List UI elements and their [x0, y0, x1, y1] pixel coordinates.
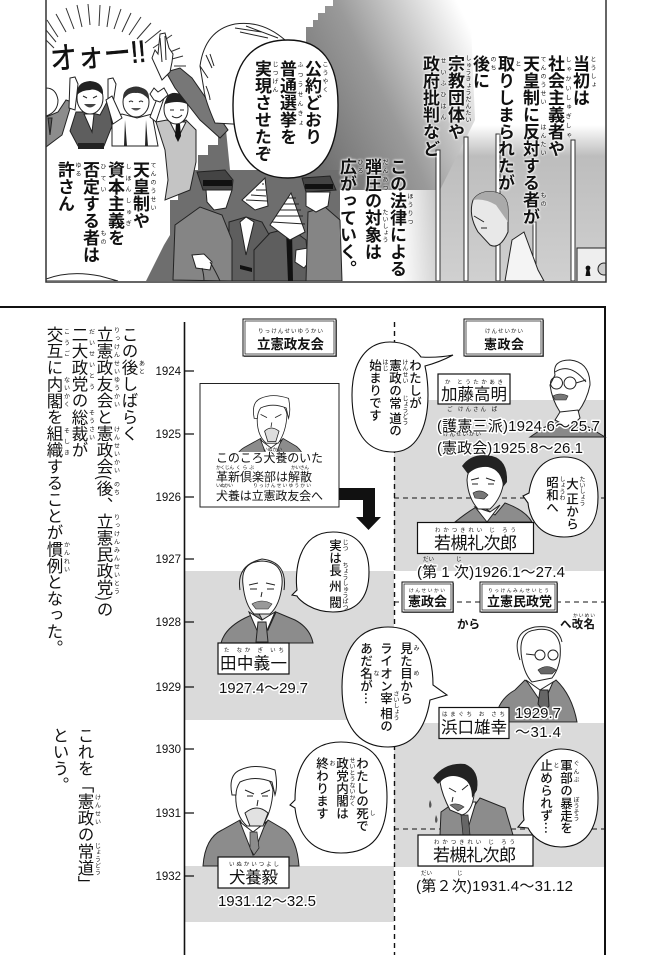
year labels: 1931: [156, 808, 181, 820]
year axis: [156, 322, 194, 955]
bubble text: 憲政の常道: [366, 359, 425, 436]
rename caption: から: から: [457, 618, 480, 631]
bottom panel frame: [0, 307, 605, 955]
speech bubble: 憲政の常道: [352, 342, 453, 452]
speech bubble: 政党内閣: [290, 742, 387, 853]
left narration: この後しばらく…: 交互こうご に 内閣ないかく を 組織そしき することが 慣例かんれい となった。: [43, 326, 72, 656]
floor curve bottom-left: [46, 274, 118, 281]
inset note text: いぬかい: [263, 446, 282, 453]
party box: 立憲民政党 (after rename): りっけんみんせいとう: [488, 588, 549, 594]
portrait: Hamaguchi Osachi: [495, 627, 577, 722]
portrait: Inukai Tsuyoshi: [203, 766, 299, 866]
party divider dashed lines: [394, 322, 604, 955]
cheering crowd: [46, 77, 196, 200]
top panel narration: この法律による…: 弾圧だんあつ の 対象たいしょう は: [361, 158, 390, 260]
inset note text: かくじん: [216, 464, 234, 471]
cone-hooded prisoner, left: [229, 178, 272, 281]
top panel narration: 当初は…: 宗教団体しゅうきょうだんたい や: [444, 55, 473, 140]
left narration: この後しばらく…: [43, 326, 146, 656]
inset note text: [216, 446, 323, 503]
top panel narration: この法律による…: 広ひろ がっていく。: [336, 158, 365, 277]
top panel narration: 当初は…: 政府批判せいふひはん など: [419, 55, 448, 157]
name: 田中義一: [218, 643, 289, 674]
bubble text: 憲政の常道: 憲政けんせい の 常道じょうどう の: [386, 359, 410, 436]
left narration: この後しばらく…: この 後あと しばらく: [118, 326, 146, 442]
term dates: Hamaguchi: 1929.7: [515, 705, 561, 722]
year labels: 1929: [156, 682, 181, 694]
term dates: Wakatsuki 1st: だい: [423, 556, 435, 563]
top panel narration: この法律による…: [336, 156, 415, 277]
cheer shout lettering: オォー!!: [49, 34, 147, 77]
name: 若槻礼次郎 (1st): わかつきれい じ ろう: [435, 527, 516, 534]
speech text: 公約どおり: [251, 60, 330, 162]
speech text: 天皇制や…: 許ゆる さん: [54, 161, 83, 212]
party header: 憲政会: [464, 319, 544, 357]
prison bars: [436, 134, 575, 281]
cone-hooded prisoner, right: [254, 193, 312, 281]
speech text: 天皇制や…: 資本主義しほんしゅぎ を: [104, 161, 133, 246]
inset note text: 犬養は立憲政友会へ: [216, 488, 323, 503]
top panel narration: 当初は…: 取と りしまられたが: [494, 55, 523, 191]
inset note text: く ら ぶ: [236, 465, 254, 471]
name: 田中義一: た なか ぎ いち: [224, 646, 284, 654]
portrait: Tanaka Giichi: [221, 559, 313, 643]
party header: 立憲政友会: 立憲政友会: [257, 336, 324, 352]
portrait: Kato Takaaki: [530, 360, 605, 437]
speech bubble: 普通選挙: [233, 40, 338, 178]
inset note panel: [200, 384, 339, 507]
term dates: Kato: (護憲三派)1924.6〜25.7: [437, 418, 600, 435]
rename caption: へ改名: かいめい: [573, 612, 595, 619]
speech text: 公約どおり: 公約こうやく どおり: [301, 60, 330, 145]
party box: 憲政会 (before rename): 憲政会: [408, 594, 447, 609]
year labels: 1926: [156, 492, 181, 504]
prisoner behind bars: [471, 192, 544, 281]
second police officer: [302, 176, 342, 281]
top panel narration: 当初は…: 後のち に: [469, 55, 498, 89]
speech text: 天皇制や…: 否定ひてい する 者もの は: [79, 161, 108, 263]
bubble text: ライオン宰相: あだ 名な が…: [357, 642, 381, 705]
man at far left: [46, 88, 72, 147]
party box: 立憲民政党 (after rename): 立憲民政党: [487, 594, 552, 609]
speech bubble: ライオン宰相: [342, 627, 447, 747]
speaker: old man's head: [200, 23, 290, 125]
cell door with keyhole: [576, 248, 606, 281]
term dates: Wakatsuki 2nd: だい: [421, 870, 433, 877]
bubble text: ライオン宰相: [357, 642, 421, 732]
left narration: この後しばらく…: 立憲政友会りっけんせいゆうかい と 憲政会けんせいかい ( 後のち 、 立憲民政党りっけんみんせいとう )の: [93, 326, 122, 618]
speech text: 公約どおり: 普通選挙ふつうせんきょ を: [276, 60, 305, 145]
name: 若槻礼次郎 (2nd): [418, 835, 533, 866]
term dates: Wakatsuki 2nd: [416, 870, 573, 895]
term dates: Wakatsuki 2nd: (第２次)1931.4〜31.12: [416, 878, 573, 895]
name: 若槻礼次郎 (2nd): わかつきれい じ ろう: [434, 839, 515, 846]
left narration: これを憲政の常道という: という。: [49, 727, 73, 793]
bubble text: 軍部の暴走: [537, 759, 581, 834]
speech bubble: 長州閥: [292, 532, 369, 612]
bubble text: 大正から昭和へ: 昭和しょうわ へ: [543, 476, 567, 514]
bubble text: わたしの死で: 政党内閣せいとうないかく は: [333, 757, 357, 820]
top manga panel: [46, 0, 610, 282]
top panel narration: 当初は…: 天皇制てんのうせい に 反対はんたい する 者もの が: [519, 55, 548, 225]
left narration: これを憲政の常道という: これを「 憲政けんせい の 常道じょうどう 」: [74, 727, 102, 892]
bubble text: 憲政の常道: 始はじ まりです: [366, 359, 390, 422]
speech bubble: 軍部の暴走: [518, 749, 598, 847]
term dates: Kato: (憲政会)1925.8〜26.1: [437, 440, 583, 457]
party box: 憲政会 (before rename): [402, 582, 454, 613]
left narration: この後しばらく…: 二大政党だいせいとう の 総裁そうさい が: [68, 326, 96, 458]
bubble text: 軍部の暴走: 止と められず…: [537, 759, 561, 834]
speech text: 天皇制や…: [54, 161, 158, 263]
top panel narration: 当初は…: 社会主義者しゃかいしゅぎしゃ や: [544, 55, 573, 157]
party box: 立憲民政党 (after rename): [480, 582, 558, 613]
year labels: 1925: [156, 429, 181, 441]
rename caption: へ改名: へ改名: [560, 617, 595, 631]
term dates: Tanaka: 1927.4〜29.7: [219, 680, 308, 697]
bubble text: わたしの死で: 終お わります: [313, 757, 337, 820]
party header: 立憲政友会: りっけんせいゆうかい: [258, 328, 323, 335]
speaker: big raised hand and arm: [152, 33, 228, 138]
speech text: 天皇制や…: 天皇制てんのうせい や: [129, 161, 158, 229]
party box: 憲政会 (before rename): けんせいかい: [409, 587, 445, 594]
year labels: [156, 366, 182, 883]
term dates: Inukai: 1931.12〜32.5: [218, 893, 316, 910]
bubble text: ライオン宰相: ライオン 宰相さいしょう の: [377, 642, 401, 732]
left narration: これを憲政の常道という: [49, 727, 102, 892]
portrait: Wakatsuki (2nd): [429, 764, 513, 835]
bubble text: わたしの死で: [313, 757, 377, 832]
term dates: Wakatsuki 1st: [417, 556, 565, 581]
top panel narration: この法律による…: この 法律ほうりつ による: [386, 158, 415, 277]
term dates: Kato: [437, 405, 600, 457]
name: 犬養毅: 犬養毅: [229, 868, 278, 887]
year labels: 1930: [156, 744, 181, 756]
name: 若槻礼次郎 (1st): 若槻礼次郎: [434, 534, 517, 553]
portrait: Wakatsuki (1st): [455, 455, 532, 522]
speech text: 公約どおり: 実現じつげん させたぞ: [251, 60, 280, 162]
bubble text: 憲政の常道: わたしが: [406, 359, 425, 409]
timeline shaded periods: [185, 400, 604, 922]
inset note text: かいさん: [291, 464, 309, 471]
dark staircase: [146, 130, 340, 281]
term dates: Hamaguchi: 〜31.4: [515, 724, 561, 741]
inset note text: いぬかい: [216, 482, 233, 489]
bubble text: 軍部の暴走: 軍部ぐんぶ の 暴走ぼうそう を: [557, 759, 581, 834]
party header: 立憲政友会: [243, 319, 337, 357]
name: 若槻礼次郎 (2nd): 若槻礼次郎: [433, 846, 516, 865]
stepped wall with halftone fade: [306, 0, 475, 190]
name: 犬養毅: いぬかいつよし: [229, 861, 279, 868]
name: 加藤高明: [438, 374, 510, 404]
name: 浜口雄幸: 浜口雄幸: [441, 718, 507, 737]
bubble text: 大正から昭和へ: 大正たいしょう から: [563, 476, 587, 530]
top panel narration: 当初は…: [419, 54, 598, 226]
name: 田中義一: 田中義一: [220, 654, 287, 673]
rename caption: へ改名: [560, 612, 595, 631]
arrow: Inukai moves to Seiyukai: [339, 488, 381, 530]
bubble text: ライオン宰相: 見み た 目め から: [397, 642, 421, 704]
term dates: Hamaguchi: [515, 705, 561, 741]
year labels: 1932: [156, 871, 181, 883]
year labels: 1924: [156, 366, 182, 378]
prison cell background: [400, 125, 606, 281]
name: 浜口雄幸: はまぐち お さち: [442, 711, 505, 718]
bubble text: 実は長州閥: 実じつ は 長州閥ちょうしゅうばつ: [326, 539, 350, 610]
term dates: Kato: ご けんさん ぱ: [447, 405, 497, 413]
name: 若槻礼次郎 (1st): [418, 522, 534, 554]
term dates: Wakatsuki 1st: (第 1 次)1926.1〜27.4: [417, 564, 565, 581]
name: 犬養毅: [218, 857, 289, 888]
man in grey suit: [156, 93, 196, 200]
inset note text: このころ犬養のいた: [216, 450, 323, 465]
bubble text: 大正から昭和へ: [543, 476, 587, 530]
inset note text: 革新倶楽部は解散: [216, 469, 312, 484]
party header: 憲政会: 憲政会: [484, 337, 524, 352]
year labels: 1927: [156, 554, 181, 566]
radiating cheer lines: [46, 4, 186, 66]
man in kimono: [69, 77, 116, 149]
panel frame: [46, 0, 606, 282]
man in white shirt: [106, 87, 168, 146]
portrait: Inukai in inset: [238, 395, 302, 452]
first police officer: [173, 170, 233, 281]
term dates: Wakatsuki 1st: じ: [456, 556, 462, 563]
party header: 憲政会: けんせいかい: [485, 328, 523, 335]
year labels: 1928: [156, 617, 181, 629]
name: 加藤高明: か とうたかあき: [445, 379, 503, 386]
term dates: Kato: けんせいかい: [443, 431, 481, 438]
name: 浜口雄幸: [439, 708, 509, 738]
speech bubble: 大正から昭和へ: [523, 457, 598, 537]
term dates: Wakatsuki 2nd: じ: [457, 870, 463, 877]
bubble text: わたしの死で: わたしの 死し で: [353, 757, 377, 832]
top panel narration: 当初は…: 当初とうしょ は: [569, 55, 598, 106]
name: 加藤高明: 加藤高明: [441, 385, 507, 404]
inset note text: りっけんせいゆうかい: [253, 482, 311, 489]
